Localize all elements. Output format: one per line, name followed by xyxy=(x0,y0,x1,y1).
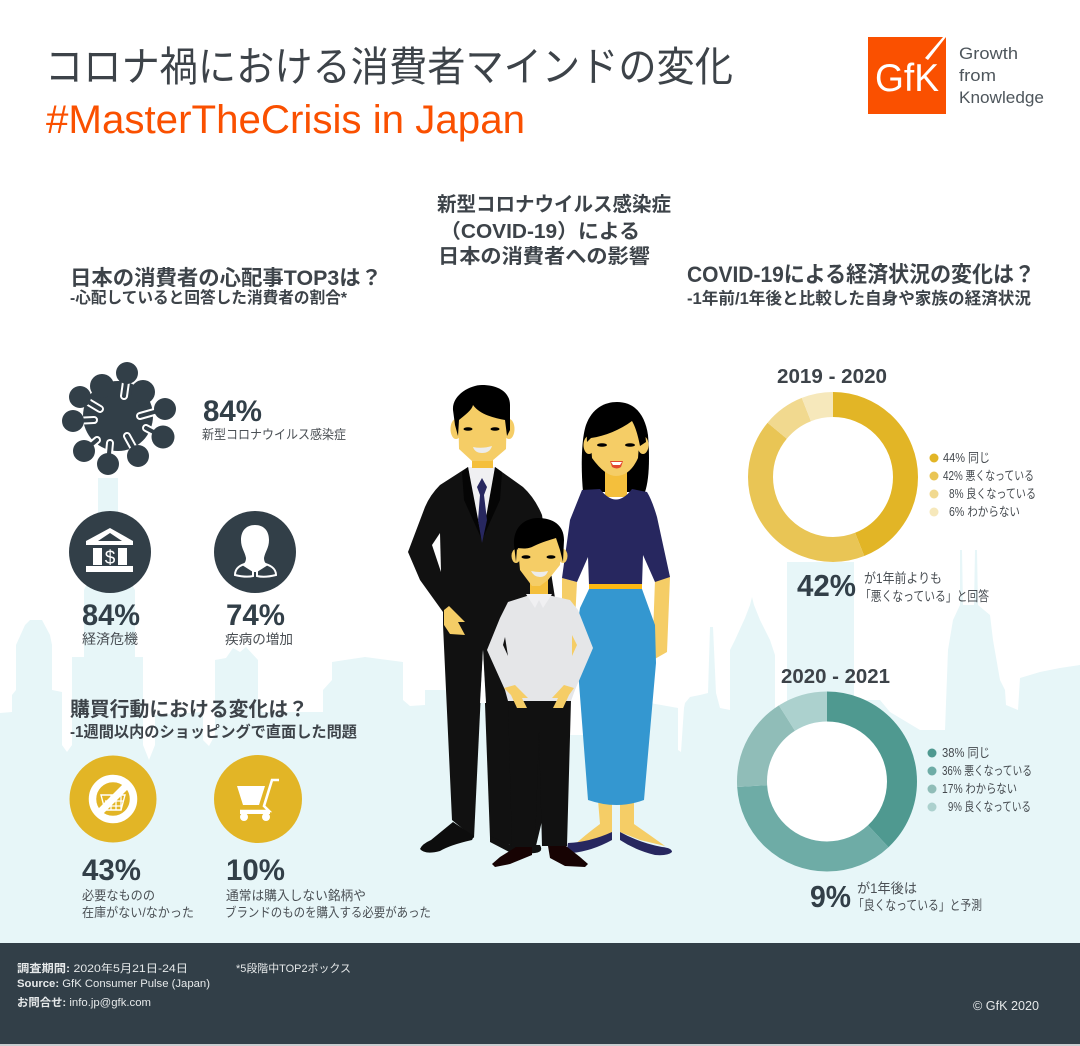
legend: 2020-2021: 17% わからない xyxy=(942,782,1017,796)
icon: shopping cart xyxy=(214,755,302,843)
title xyxy=(45,44,733,142)
boy xyxy=(487,518,593,867)
heading: worries: 日本の消費者の心配事TOP3は？ xyxy=(70,266,382,290)
chart: 2020-2021 donut xyxy=(752,666,902,856)
stat: COVID-19 84% xyxy=(202,395,346,442)
footer: お問合せ: info.jp@gfk.com xyxy=(17,995,151,1009)
center heading: 日本の消費者への影響 xyxy=(438,245,650,268)
callout: 9% better: 「良くなっている」と予測 xyxy=(853,898,982,913)
icon: no basket xyxy=(70,756,156,842)
footer xyxy=(0,943,1080,1046)
legend: 2019-2020: 44% 同じ xyxy=(943,451,990,465)
legend: 2020-2021: 9% 良くなっている xyxy=(948,799,1031,814)
legend: 2020-2021 xyxy=(928,746,1032,814)
stat: disease 74% xyxy=(225,599,293,647)
GfK logo: from xyxy=(959,67,996,85)
callout: 9% better: が1年後は xyxy=(857,881,917,896)
chart: 2019-2020 donut xyxy=(760,366,906,550)
footer: © GfK 2020 xyxy=(973,998,1039,1013)
callout: 9% better: 9% xyxy=(810,879,851,914)
stat: out of stock 43% xyxy=(82,854,194,920)
stat: out of stock 43%: 在庫がない/なかった xyxy=(82,905,194,920)
heading: shopping change: 購買行動における変化は？ xyxy=(70,698,308,721)
callout: 42% worse: 「悪くなっている」と回答 xyxy=(860,588,989,604)
GfK logo xyxy=(868,37,1044,114)
stat: out of stock 43%: 必要なものの xyxy=(82,888,155,903)
chart: 2019-2020 donut: 2019 - 2020 xyxy=(777,366,887,388)
GfK logo: GfK xyxy=(875,57,939,100)
icon: bank: $ xyxy=(105,548,116,569)
chart: 2020-2021 donut: 2020 - 2021 xyxy=(781,666,890,688)
footer: Source: GfK Consumer Pulse (Japan) xyxy=(17,978,210,990)
title: コロナ禍における消費者マインドの変化 xyxy=(45,44,733,90)
stat: disease 74%: 74% xyxy=(226,599,285,632)
heading: worries: -心配していると回答した消費者の割合* xyxy=(70,288,348,307)
heading: economic change: COVID-19による経済状況の変化は？ xyxy=(687,262,1035,287)
skyline background xyxy=(0,478,1080,943)
legend: 2020-2021: 36% 悪くなっている xyxy=(942,764,1032,778)
icon: person xyxy=(214,511,296,593)
heading: economic change: -1年前/1年後と比較した自身や家族の経済状況 xyxy=(687,288,1031,308)
heading: shopping change xyxy=(70,698,357,741)
heading: worries xyxy=(70,266,382,307)
stat: economic crisis 84%: 経済危機 xyxy=(82,631,138,647)
center heading: （COVID-19）による xyxy=(440,220,640,243)
GfK logo: Knowledge xyxy=(959,89,1044,107)
stat: disease 74%: 疾病の増加 xyxy=(225,632,293,647)
callout: 42% worse xyxy=(797,568,989,604)
stat: economic crisis 84% xyxy=(82,599,140,647)
GfK logo: Growth xyxy=(959,45,1018,63)
legend: 2019-2020: 42% 悪くなっている xyxy=(943,469,1034,483)
stat: other brands 10%: 10% xyxy=(226,854,285,887)
callout: 9% better xyxy=(810,879,982,914)
stat: economic crisis 84%: 84% xyxy=(82,599,140,632)
icon: bank xyxy=(69,511,151,593)
heading: shopping change: -1週間以内のショッピングで直面した問題 xyxy=(70,722,357,741)
footer: *5段階中TOP2ボックス xyxy=(236,961,351,975)
stat: other brands 10%: 通常は購入しない銘柄や xyxy=(226,888,366,903)
legend: 2020-2021: 38% 同じ xyxy=(942,746,990,760)
stat: out of stock 43%: 43% xyxy=(82,854,141,887)
legend: 2019-2020: 8% 良くなっている xyxy=(949,486,1036,501)
man xyxy=(408,385,571,855)
footer: 調査期間: 2020年5月21日-24日 xyxy=(17,961,188,975)
woman xyxy=(562,402,672,855)
title: #MasterTheCrisis in Japan xyxy=(46,98,525,142)
legend: 2019-2020: 6% わからない xyxy=(949,505,1020,519)
callout: 42% worse: 42% xyxy=(797,568,856,603)
legend: 2019-2020 xyxy=(930,451,1036,519)
stat: other brands 10% xyxy=(225,854,431,920)
illustration: family xyxy=(408,385,672,867)
center heading xyxy=(437,192,671,268)
callout: 42% worse: が1年前よりも xyxy=(864,570,942,586)
stat: COVID-19 84%: 新型コロナウイルス感染症 xyxy=(202,427,346,442)
stat: COVID-19 84%: 84% xyxy=(203,395,262,428)
icon: virus xyxy=(62,362,176,475)
stat: other brands 10%: ブランドのものを購入する必要があった xyxy=(225,905,431,920)
heading: economic change xyxy=(687,262,1035,308)
center heading: 新型コロナウイルス感染症 xyxy=(437,192,671,216)
